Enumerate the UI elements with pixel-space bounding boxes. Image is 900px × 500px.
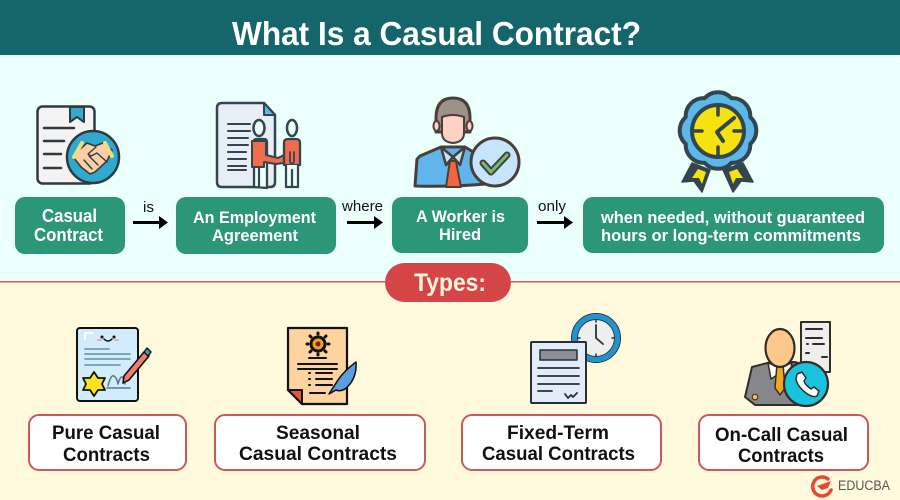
- step: when needed: [583, 197, 884, 253]
- type: on-call casual contracts: On-Call Casual: [715, 424, 848, 446]
- icon: on-call worker: [745, 322, 830, 406]
- icon: seasonal contract: [288, 328, 356, 404]
- arrow: only: only: [538, 199, 567, 215]
- types heading pill: Types:: [414, 269, 486, 297]
- type: pure casual contracts: Contracts: [63, 444, 150, 466]
- step: employment agreement: An Employment: [193, 208, 316, 227]
- type: pure casual contracts: Pure Casual: [52, 422, 160, 444]
- type: on-call casual contracts: Contracts: [738, 445, 824, 467]
- icon: pure casual contract: [77, 328, 151, 401]
- step: when needed: when needed, without guaranteed: [600, 209, 865, 227]
- step: when needed: hours or long-term commitments: [601, 227, 861, 245]
- icon: contract with handshake: [38, 106, 119, 184]
- step: casual contract: [15, 197, 125, 254]
- step: casual contract: Casual: [42, 206, 97, 226]
- type: on-call casual contracts: [699, 415, 868, 470]
- type: seasonal casual contracts: Casual Contracts: [239, 443, 397, 465]
- type: seasonal casual contracts: Seasonal: [276, 422, 360, 444]
- icon: fixed-term contract with clock: [531, 314, 620, 403]
- title banner: [0, 0, 900, 55]
- icon: worker with check mark: [415, 98, 519, 187]
- step: employment agreement: Agreement: [212, 226, 298, 245]
- type: pure casual contracts: [29, 415, 186, 470]
- arrow: only: [537, 199, 573, 229]
- type: seasonal casual contracts: [215, 415, 425, 470]
- arrow: where: where: [341, 199, 383, 215]
- step: casual contract: Contract: [34, 225, 103, 245]
- step: worker is hired: Hired: [439, 225, 481, 244]
- types heading pill: [385, 263, 511, 302]
- title banner: What Is a Casual Contract?: [232, 15, 641, 52]
- step: worker is hired: A Worker is: [416, 207, 505, 226]
- arrow: where: [341, 199, 383, 229]
- icon: clock badge: [680, 92, 756, 192]
- step: worker is hired: [392, 197, 528, 253]
- step: employment agreement: [176, 197, 336, 254]
- arrow: is: [133, 200, 168, 229]
- type: fixed-term casual contracts: Casual Contracts: [482, 443, 635, 465]
- type: fixed-term casual contracts: Fixed-Term: [507, 422, 609, 444]
- icon: employment agreement: [217, 103, 300, 188]
- type: fixed-term casual contracts: [462, 415, 661, 470]
- logo: EDUCBA: [813, 477, 890, 496]
- arrow: is: is: [143, 200, 154, 216]
- logo: EDUCBA: EDUCBA: [838, 478, 890, 493]
